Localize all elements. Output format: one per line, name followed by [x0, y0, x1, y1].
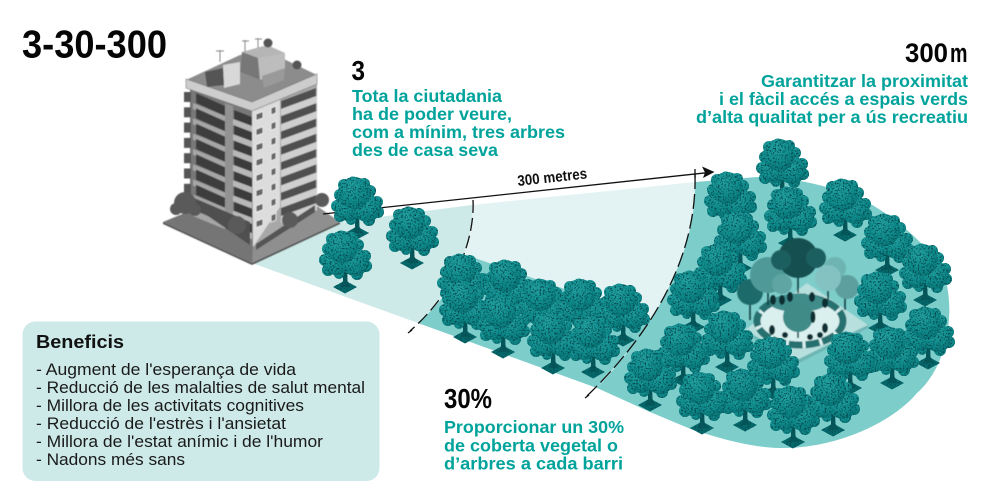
trees: back of the park: [694, 138, 952, 306]
zone: tree cover strip: [418, 255, 652, 388]
central plaza with people and trees: [737, 238, 868, 364]
benefits list: [36, 360, 365, 469]
building plot: [163, 185, 340, 263]
rooftop penthouse: [240, 45, 285, 80]
people: [769, 292, 828, 340]
title: 3-30-300: [22, 24, 167, 66]
trees: forest layer: [319, 138, 952, 378]
text block: 300 m: [696, 38, 968, 127]
trees: left of the plaza: [667, 270, 720, 334]
plaza platform: [745, 283, 868, 360]
plaza trees: [737, 238, 859, 338]
text block: 300 m: Garantitzar la proximitat: [761, 71, 968, 91]
text block: 3: [352, 55, 565, 160]
trees: front of the park: [624, 272, 955, 448]
benefits list: - Millora de les activitats cognitives: [36, 396, 304, 415]
text block: 300 m: 300: [905, 38, 948, 68]
text block: 300 m: m: [950, 38, 968, 68]
text block: 30%: d’arbres a cada barri: [444, 454, 623, 474]
text block: 30%: 30%: [444, 383, 492, 414]
arrow: 300 metres: [323, 165, 714, 214]
benefits list: - Reducció de l'estrès i l'ansietat: [36, 414, 286, 433]
building illustration: [163, 38, 340, 265]
text block: 3: Tota la ciutadania: [352, 86, 502, 106]
text block: 30%: [444, 383, 624, 474]
building facades: [190, 84, 253, 247]
dashed boundary: second arc: [587, 174, 695, 396]
text block: 30%: Proporcionar un 30%: [444, 417, 624, 437]
dashed boundary: first arc: [410, 200, 473, 331]
text block: 3: des de casa seva: [352, 140, 498, 160]
benefits list: - Reducció de les malalties de salut mental: [36, 378, 365, 397]
trees: 30 percent cover: [437, 254, 650, 378]
trees near the building: [319, 176, 439, 294]
benefits list: - Nadons més sans: [36, 450, 185, 469]
zone: 300 m park area: [597, 177, 949, 448]
floors: [184, 88, 317, 239]
text block: 300 m: d’alta qualitat per a ús recreatiu: [696, 107, 968, 127]
seating circle: [755, 296, 845, 348]
arrow: 300 metres: 300 metres: [517, 165, 588, 190]
benefits list: - Millora de l'estat anímic i de l'humor: [36, 432, 323, 451]
text block: 3: 3: [352, 55, 365, 86]
zone: first radius, light band: [252, 205, 472, 323]
panel: benefits: [22, 322, 380, 481]
text block: 3: com a mínim, tres arbres: [352, 122, 565, 142]
street trees by building: [170, 192, 329, 234]
benefits heading: Beneficis: [36, 331, 124, 352]
roof: [186, 50, 317, 102]
text block: 300 m: i el fàcil accés a espais verds: [719, 89, 968, 109]
text block: 3: ha de poder veure,: [352, 104, 512, 124]
text block: 30%: de coberta vegetal o: [444, 436, 618, 456]
benefits list: - Augment de l'esperança de vida: [36, 360, 297, 379]
boundary ticks: [408, 330, 589, 398]
zone: second radius, palest band: [418, 182, 695, 388]
